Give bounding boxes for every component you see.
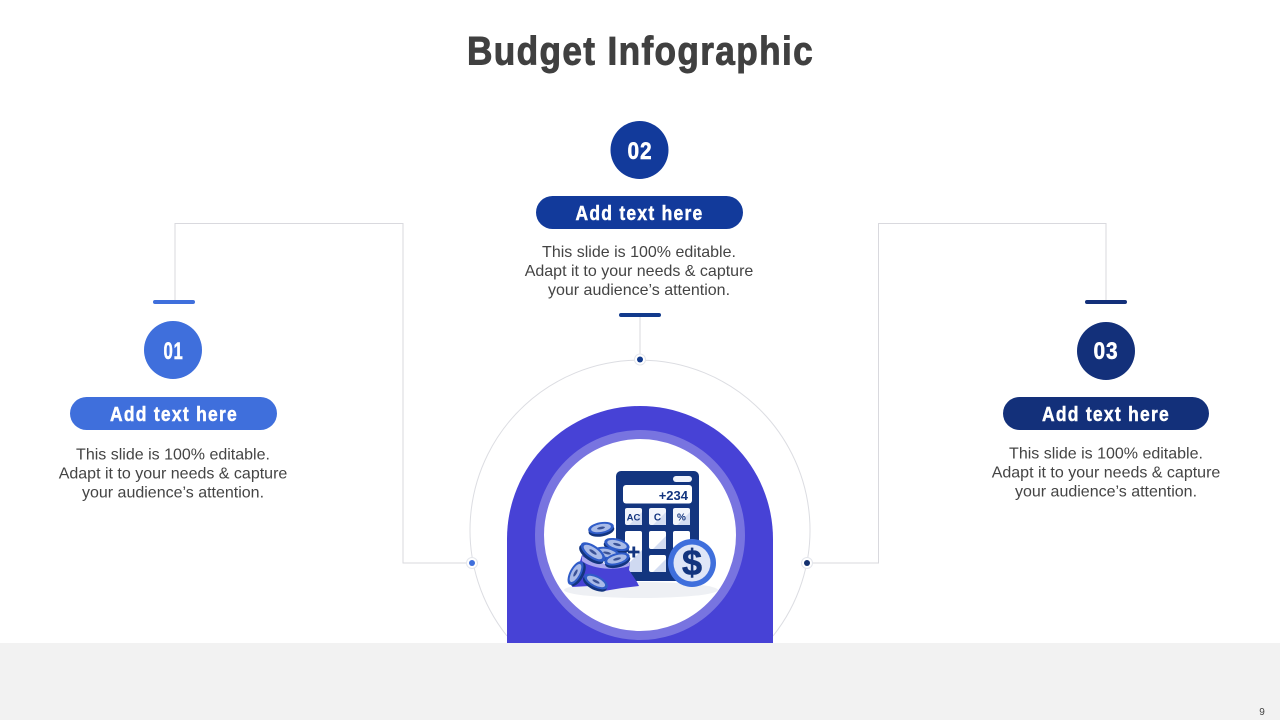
arch panel — [507, 406, 773, 643]
description: Adapt it to your needs & capture — [59, 466, 287, 482]
description: Adapt it to your needs & capture — [992, 464, 1220, 482]
description: This slide is 100% editable. — [542, 244, 736, 261]
heading: Add text here — [1042, 403, 1170, 426]
coins — [564, 520, 632, 595]
heading pill — [1003, 397, 1209, 430]
node: step 02 — [634, 354, 646, 365]
step 03 — [992, 300, 1220, 500]
calculator: % — [677, 512, 686, 524]
step 02 — [525, 121, 753, 317]
description — [992, 446, 1220, 500]
number: 03 — [1094, 338, 1118, 365]
ground shadow — [564, 582, 718, 598]
title: Budget Infographic — [467, 30, 814, 74]
description: your audience’s attention. — [548, 282, 730, 299]
description: This slide is 100% editable. — [1009, 446, 1203, 462]
calculator: AC — [627, 512, 640, 524]
description: your audience’s attention. — [1015, 484, 1197, 500]
description: Adapt it to your needs & capture — [525, 263, 753, 280]
step 01 — [59, 300, 287, 502]
number badge — [610, 121, 668, 179]
heading: Add text here — [110, 403, 238, 426]
calculator: +234 — [659, 488, 689, 503]
node: step 01 — [466, 558, 478, 568]
number badge — [1077, 322, 1135, 380]
accent bar — [153, 300, 195, 304]
dollar coin: $ — [682, 542, 702, 583]
description — [525, 244, 753, 299]
plus sign — [628, 546, 640, 558]
connector: step 03 to hub — [807, 224, 1106, 563]
number badge — [144, 321, 202, 379]
description: This slide is 100% editable. — [76, 446, 270, 464]
heading pill — [70, 397, 277, 430]
calculator: C — [654, 512, 661, 524]
page number: 9 — [1259, 707, 1265, 718]
number: 01 — [164, 338, 184, 365]
description — [59, 446, 287, 502]
outer hub ring — [470, 360, 810, 636]
connector: step 02 to hub — [639, 317, 641, 359]
accent bar — [1085, 300, 1127, 304]
icon: calculator, coins and money bag — [564, 471, 718, 598]
heading: Add text here — [576, 202, 704, 225]
description: your audience’s attention. — [82, 484, 264, 502]
inner ring — [540, 434, 740, 636]
dollar coin — [668, 539, 716, 587]
number: 02 — [628, 138, 652, 165]
footer band — [0, 643, 1280, 720]
connector: step 01 to hub — [175, 224, 472, 563]
node: step 03 — [802, 558, 812, 568]
money bag — [572, 555, 639, 591]
heading pill — [536, 196, 743, 229]
accent bar — [619, 313, 661, 317]
calculator — [616, 471, 699, 581]
